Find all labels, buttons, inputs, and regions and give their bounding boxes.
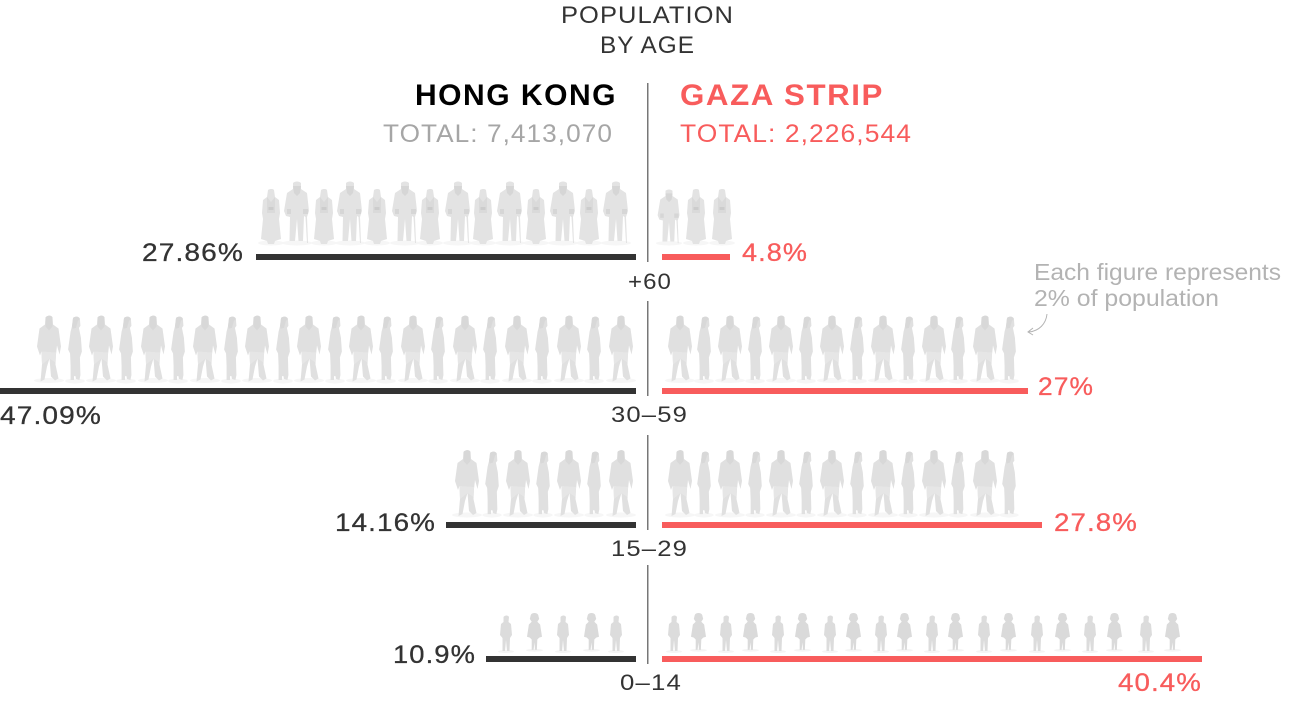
age label 0–14: 0–14: [620, 670, 682, 695]
bar: Hong Kong 0–14: [486, 656, 636, 662]
center axis line: 0–14: [647, 565, 648, 664]
bar: Gaza 15–29: [662, 522, 1042, 528]
row 15–29: Hong Kong figures: [452, 450, 636, 518]
bar: Gaza +60: [662, 254, 730, 260]
center axis line: +60: [647, 83, 648, 262]
note: each figure represents 2%: 2% of population: [1034, 285, 1219, 311]
age label 15–29: 15–29: [611, 536, 688, 561]
title: POPULATION: [561, 2, 734, 29]
value: Gaza 0–14: 40.4%: [1118, 669, 1202, 697]
center axis line: 30–59: [647, 301, 648, 396]
row +60: Hong Kong figures: [258, 182, 631, 246]
note: each figure represents 2%: Each figure represents: [1034, 259, 1281, 285]
bar: Gaza 0–14: [662, 656, 1202, 662]
value: Hong Kong 15–29: 14.16%: [335, 509, 436, 537]
bar: Hong Kong 15–29: [446, 522, 636, 528]
value: Gaza +60: 4.8%: [742, 239, 808, 267]
bar: Gaza 30–59: [662, 388, 1028, 394]
Gaza total: TOTAL: 2,226,544: [680, 120, 912, 148]
title: BY AGE: [600, 32, 695, 59]
row +60: Gaza figures: [656, 189, 735, 246]
age label +60: +60: [628, 269, 672, 294]
center axis line: 15–29: [647, 435, 648, 530]
value: Hong Kong 30–59: 47.09%: [0, 402, 102, 430]
value: Hong Kong +60: 27.86%: [142, 239, 244, 267]
heading: Gaza Strip: GAZA STRIP: [680, 79, 884, 112]
age label 30–59: 30–59: [611, 402, 688, 427]
value: Hong Kong 0–14: 10.9%: [393, 641, 476, 669]
row 0–14: Gaza figures: [666, 613, 1181, 653]
Hong Kong total: TOTAL: 7,413,070: [383, 120, 613, 148]
row 30–59: Gaza figures: [665, 316, 1019, 383]
note: each figure represents 2%: [1028, 259, 1281, 335]
row 30–59: Hong Kong figures: [34, 316, 636, 383]
bar: Hong Kong 30–59: [0, 388, 636, 394]
value: Gaza 30–59: 27%: [1038, 373, 1094, 401]
value: Gaza 15–29: 27.8%: [1054, 509, 1138, 537]
arrow to figure: [1028, 314, 1047, 335]
bar: Hong Kong +60: [256, 254, 636, 260]
heading: Hong Kong: HONG KONG: [415, 79, 617, 112]
row 0–14: Hong Kong figures: [498, 613, 624, 653]
row 15–29: Gaza figures: [665, 450, 1019, 518]
